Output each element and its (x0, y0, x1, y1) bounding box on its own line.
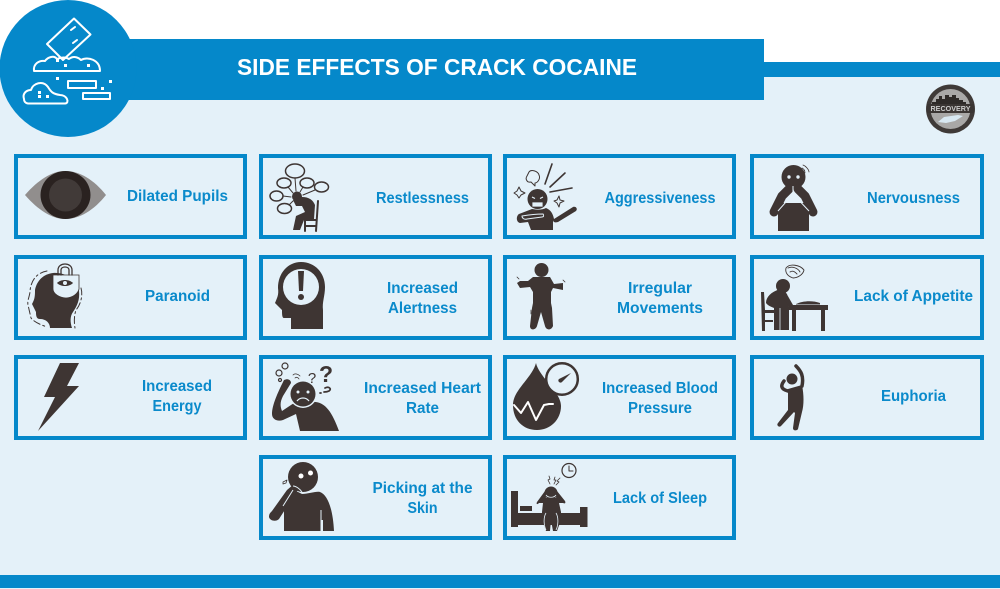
icon: lightning bolt (38, 363, 79, 431)
icon: confused figure: ? (308, 370, 316, 387)
card: Restlessness: Restlessness (376, 190, 469, 207)
card: Euphoria: Euphoria (881, 388, 946, 405)
icon: blood drop and gauge (513, 363, 578, 430)
card: Increased Blood Pressure: Increased Blood (602, 380, 718, 397)
icon: crack cocaine badge (0, 0, 136, 137)
card: Dilated Pupils: Dilated Pupils (127, 188, 228, 205)
card: Restlessness (261, 156, 490, 237)
card: Increased Blood Pressure (505, 357, 734, 438)
bottom bar (0, 575, 1000, 588)
icon: aggressive figure (514, 164, 577, 230)
card: Nervousness: Nervousness (867, 190, 960, 207)
card: Paranoid (16, 257, 245, 338)
card: Aggressiveness (505, 156, 734, 237)
icon: irregular movement figure (517, 263, 565, 329)
card: Lack of Sleep (505, 457, 734, 538)
icon: dancing figure (777, 366, 804, 430)
card: Picking at the Skin: Skin (408, 500, 438, 517)
card: Increased Energy (16, 357, 245, 438)
card: Lack of Appetite (752, 257, 982, 338)
card: Increased Heart Rate (261, 357, 490, 438)
card: Irregular Movements (505, 257, 734, 338)
logo: Carolina Recovery (926, 84, 975, 134)
card: Lack of Appetite: Lack of Appetite (854, 288, 973, 305)
icon: person at table (761, 265, 828, 331)
icon: dilated eye (25, 171, 106, 219)
card: Dilated Pupils (16, 156, 245, 237)
card: Increased Alertness: Alertness (388, 300, 457, 317)
logo: Carolina Recovery: RECOVERY (930, 106, 971, 113)
card: Increased Heart Rate: Rate (406, 400, 439, 417)
card: Paranoid: Paranoid (145, 288, 210, 305)
icon: sleepless figure on bed (511, 464, 588, 531)
icon: confused figure: ? (319, 361, 333, 387)
title banner (120, 39, 764, 100)
card: Increased Energy: Energy (152, 398, 202, 415)
card: Irregular Movements: Movements (617, 300, 703, 317)
card: Euphoria (752, 357, 982, 438)
card: Increased Alertness: Increased (387, 280, 458, 297)
card: Picking at the Skin (261, 457, 490, 538)
icon: restless thoughts (270, 164, 328, 231)
right header stripe (760, 62, 1000, 77)
card: Increased Blood Pressure: Pressure (628, 400, 692, 417)
title: SIDE EFFECTS OF CRACK COCAINE (237, 54, 637, 80)
card: Increased Heart Rate: Increased Heart (364, 380, 481, 397)
icon: confused figure (272, 361, 339, 431)
icon: paranoid head (28, 264, 82, 328)
card: Increased Energy: Increased (142, 378, 212, 395)
icon: nervous figure (774, 165, 813, 231)
card: Aggressiveness: Aggressiveness (604, 190, 716, 207)
card: Irregular Movements: Irregular (628, 280, 692, 297)
card: Increased Alertness (261, 257, 490, 338)
card: Lack of Sleep: Lack of Sleep (613, 490, 707, 507)
icon: alert head (275, 262, 325, 329)
card: Nervousness (752, 156, 982, 237)
icon: skin-picking figure (269, 462, 334, 531)
card: Picking at the Skin: Picking at the (372, 480, 473, 497)
